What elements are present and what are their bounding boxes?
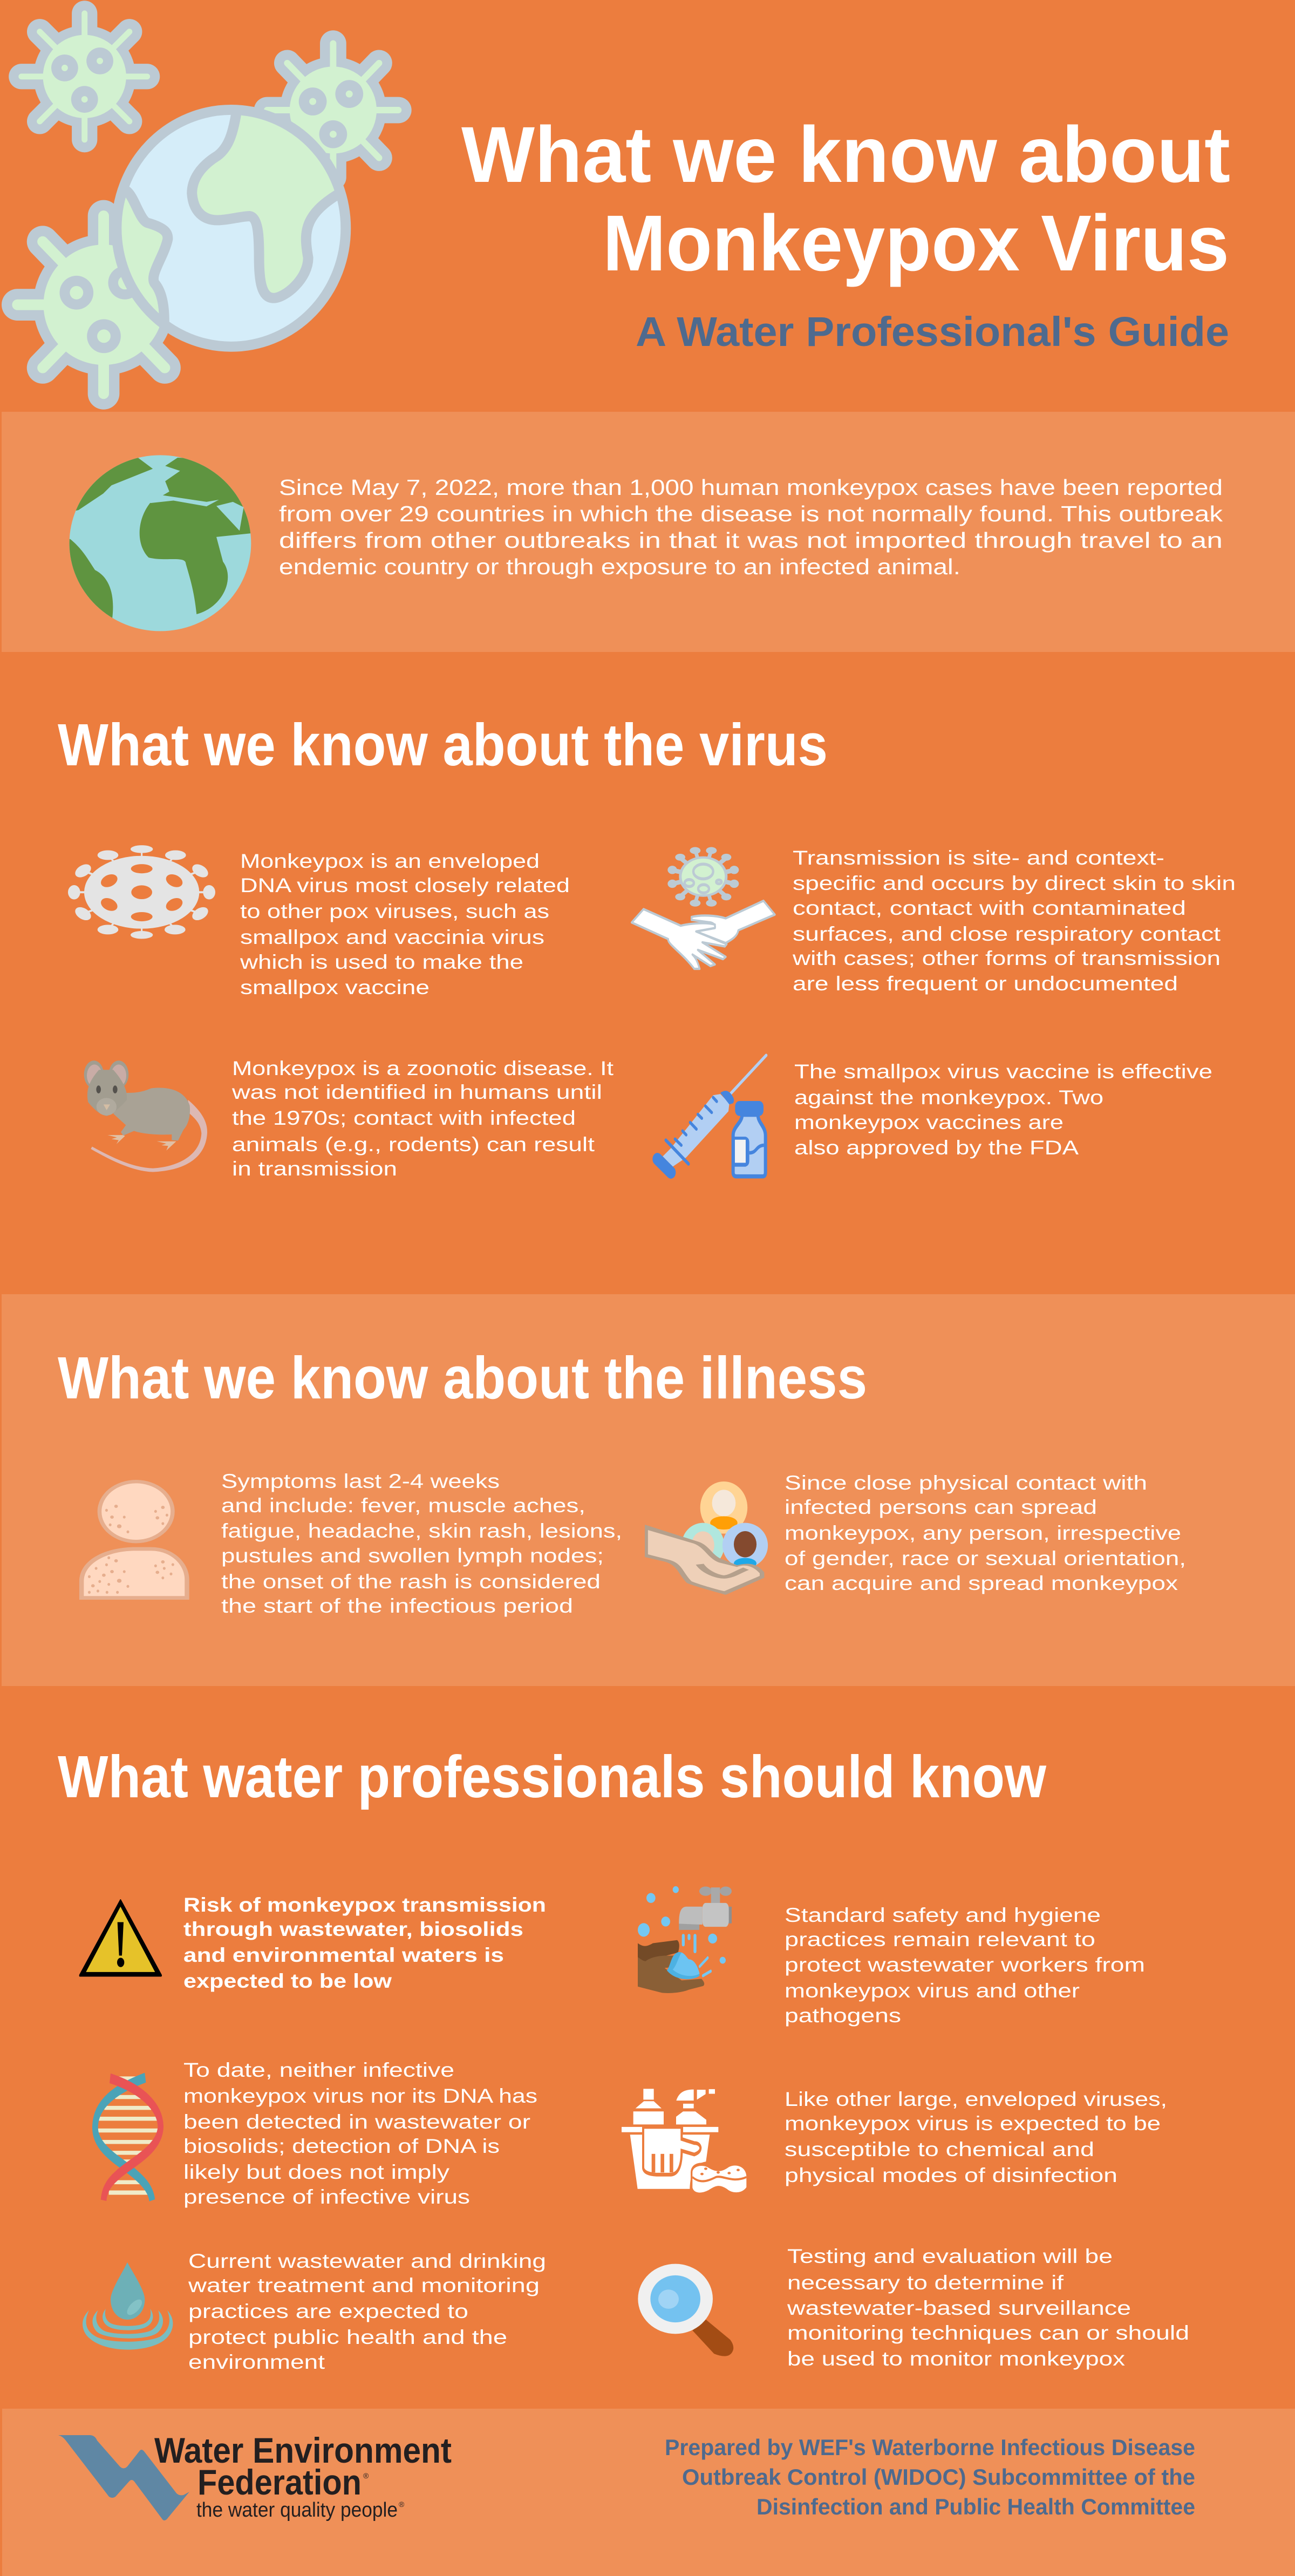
text: close contact: monkeypox, any person, irrespective [785,1522,1181,1544]
text: testing and evaluation: necessary to determine if [787,2272,1064,2294]
text: disinfection: susceptible to chemical and [785,2138,1094,2160]
text: current treatment: environment [188,2351,325,2373]
text: safety and hygiene [785,1904,1145,2027]
text: symptoms [221,1470,622,1617]
text: disinfection [785,2088,1167,2186]
text: transmission: with cases; other forms of transmission [792,947,1221,969]
text: symptoms: fatigue, headache, skin rash, lesions, [221,1520,622,1542]
title: Monkeypox Virus [603,199,1229,288]
text: transmission: surfaces, and close respiratory contact [793,923,1221,945]
text: testing and evaluation [787,2245,1189,2370]
text: DNA not detected: presence of infective virus [183,2186,470,2208]
text: safety and hygiene: protect wastewater workers from [785,1954,1145,1976]
subtitle: A Water Professional's Guide [636,309,1229,355]
text: testing and evaluation: monitoring techniques can or should [787,2322,1189,2344]
icon: water drop with ripples [83,2262,173,2350]
text: transmission: specific and occurs by direct skin to skin [793,872,1236,894]
text: close contact: of gender, race or sexual orientation, [785,1547,1186,1569]
text: enveloped DNA virus [240,850,570,998]
text: risk is low: through wastewater, biosolids [183,1918,523,1940]
text: symptoms: Symptoms last 2-4 weeks [221,1470,500,1492]
text: safety and hygiene: Standard safety and hygiene [785,1904,1101,1926]
icon: syringe and vial [657,1055,766,1177]
text: disinfection: Like other large, enveloped viruses, [785,2088,1167,2110]
icon: earth [69,455,251,631]
text: current treatment: practices are expected to [188,2300,468,2322]
text: current treatment: water treatment and monitoring [188,2274,540,2296]
text: disinfection: physical modes of disinfection [785,2164,1117,2186]
text: DNA not detected: likely but does not imply [183,2161,450,2183]
icon: virus top left [22,13,147,140]
text: symptoms: and include: fever, muscle aches, [221,1494,585,1517]
text: enveloped DNA virus: which is used to make the [240,951,523,973]
text: current treatment: protect public health and the [188,2326,507,2348]
text: testing and evaluation: be used to monitor monkeypox [787,2348,1126,2370]
text: zoonotic disease: in transmission [232,1158,397,1180]
text: enveloped DNA virus: to other pox viruses, such as [240,900,549,922]
icon: handshake with virus [632,847,775,969]
intro text: from over 29 countries in which the disease is not normally found. This outbreak [279,501,1223,526]
icon: warning sign [80,1900,161,1975]
logo: Water Environment Federation: Federation [197,2462,362,2502]
text: current treatment: Current wastewater and drinking [188,2250,546,2272]
text: transmission: are less frequent or undocumented [793,973,1178,995]
text: prepared by [665,2435,1195,2519]
text: current treatment [188,2250,546,2373]
text: risk is low: expected to be low [183,1970,392,1992]
text: enveloped DNA virus: smallpox vaccine [240,976,430,998]
intro text: endemic country or through exposure to an infected animal. [279,554,960,579]
text: smallpox vaccine: also approved by the FDA [794,1137,1079,1159]
icon: person with rash [79,1480,189,1600]
panel: introduction [2,412,1295,652]
text: smallpox vaccine: The smallpox virus vaccine is effective [794,1061,1212,1083]
text: zoonotic disease: the 1970s; contact with infected [232,1107,576,1129]
heading: the virus: What we know about the virus [58,712,828,778]
panel: the illness [2,1294,1295,1686]
text: DNA not detected: been detected in wastewater or [183,2111,530,2133]
text: DNA not detected: biosolids; detection of DNA is [183,2135,500,2157]
text: close contact [785,1472,1186,1594]
text: transmission: Transmission is site- and context- [793,847,1164,869]
text: smallpox vaccine: monkeypox vaccines are [794,1111,1064,1133]
text: smallpox vaccine [794,1061,1212,1159]
text: risk is low: and environmental waters is [183,1944,504,1966]
text: transmission: contact, contact with contaminated [793,897,1186,919]
panel: footer [2,2409,1295,2576]
text: close contact: can acquire and spread monkeypox [785,1572,1178,1594]
text: DNA not detected: monkeypox virus nor its DNA has [183,2085,537,2107]
text: prepared by: Outbreak Control (WIDOC) Subcommittee of the [682,2464,1195,2490]
text: close contact: infected persons can spread [785,1496,1097,1518]
header: globe with viruses illustration [17,13,398,393]
icon: magnifying glass [638,2264,733,2356]
text: safety and hygiene: practices remain relevant to [785,1928,1095,1950]
text: symptoms: the start of the infectious period [221,1595,573,1617]
logo: Water Environment Federation: Water Environment [154,2430,452,2470]
icon: mouse [84,1061,207,1172]
text: close contact: Since close physical contact with [785,1472,1147,1494]
text: enveloped DNA virus: DNA virus most closely related [240,874,570,896]
text: symptoms: the onset of the rash is considered [221,1571,601,1593]
logo: Water Environment Federation [58,2430,452,2521]
icon: DNA helix [95,2076,161,2200]
icon: hand washing at tap [638,1886,732,1993]
text: testing and evaluation: wastewater-based surveillance [787,2297,1131,2319]
text: prepared by: Disinfection and Public Health Committee [756,2494,1195,2519]
text: symptoms: pustules and swollen lymph nodes; [221,1545,604,1567]
text: safety and hygiene: monkeypox virus and other [785,1980,1080,2002]
text: enveloped DNA virus: Monkeypox is an enveloped [240,850,540,872]
intro text: differs from other outbreaks in that it was not imported through travel to an [279,528,1223,553]
text: disinfection: monkeypox virus is expected to be [785,2112,1161,2135]
text: zoonotic disease: Monkeypox is a zoonotic disease. It [232,1057,614,1079]
text: risk is low: Risk of monkeypox transmission [183,1894,546,1916]
text: safety and hygiene: pathogens [785,2004,901,2027]
icon: globe [107,102,349,346]
icon: hand holding diverse people [645,1481,768,1595]
text: risk is low [183,1894,546,1992]
logo: Water Environment Federation: ® [399,2500,405,2509]
title [461,111,1230,288]
text: transmission [792,847,1236,995]
text: testing and evaluation: Testing and evaluation will be [787,2245,1113,2267]
heading: water professionals: What water professionals should know [58,1744,1046,1810]
text: zoonotic disease: animals (e.g., rodents) can result [232,1133,595,1156]
text: smallpox vaccine: against the monkeypox. Two [794,1086,1103,1109]
icon: grey virus [68,845,215,939]
logo: Water Environment Federation: the water quality people [196,2499,398,2521]
text: zoonotic disease: was not identified in humans until [231,1081,602,1103]
intro text [279,475,1223,579]
intro text: Since May 7, 2022, more than 1,000 human monkeypox cases have been reported [279,475,1223,500]
heading: the illness: What we know about the illness [58,1345,867,1411]
text: prepared by: Prepared by WEF's Waterborne Infectious Disease [665,2435,1195,2460]
icon: cleaning supplies [622,2089,747,2194]
icon: virus bottom left [17,216,190,393]
logo: Water Environment Federation: ® [363,2471,369,2480]
text: DNA not detected: To date, neither infective [183,2059,454,2081]
text: zoonotic disease [231,1057,614,1180]
title: What we know about [461,111,1230,199]
text: DNA not detected [183,2059,537,2208]
text: enveloped DNA virus: smallpox and vaccinia virus [240,926,544,948]
icon: virus top right [267,44,398,177]
